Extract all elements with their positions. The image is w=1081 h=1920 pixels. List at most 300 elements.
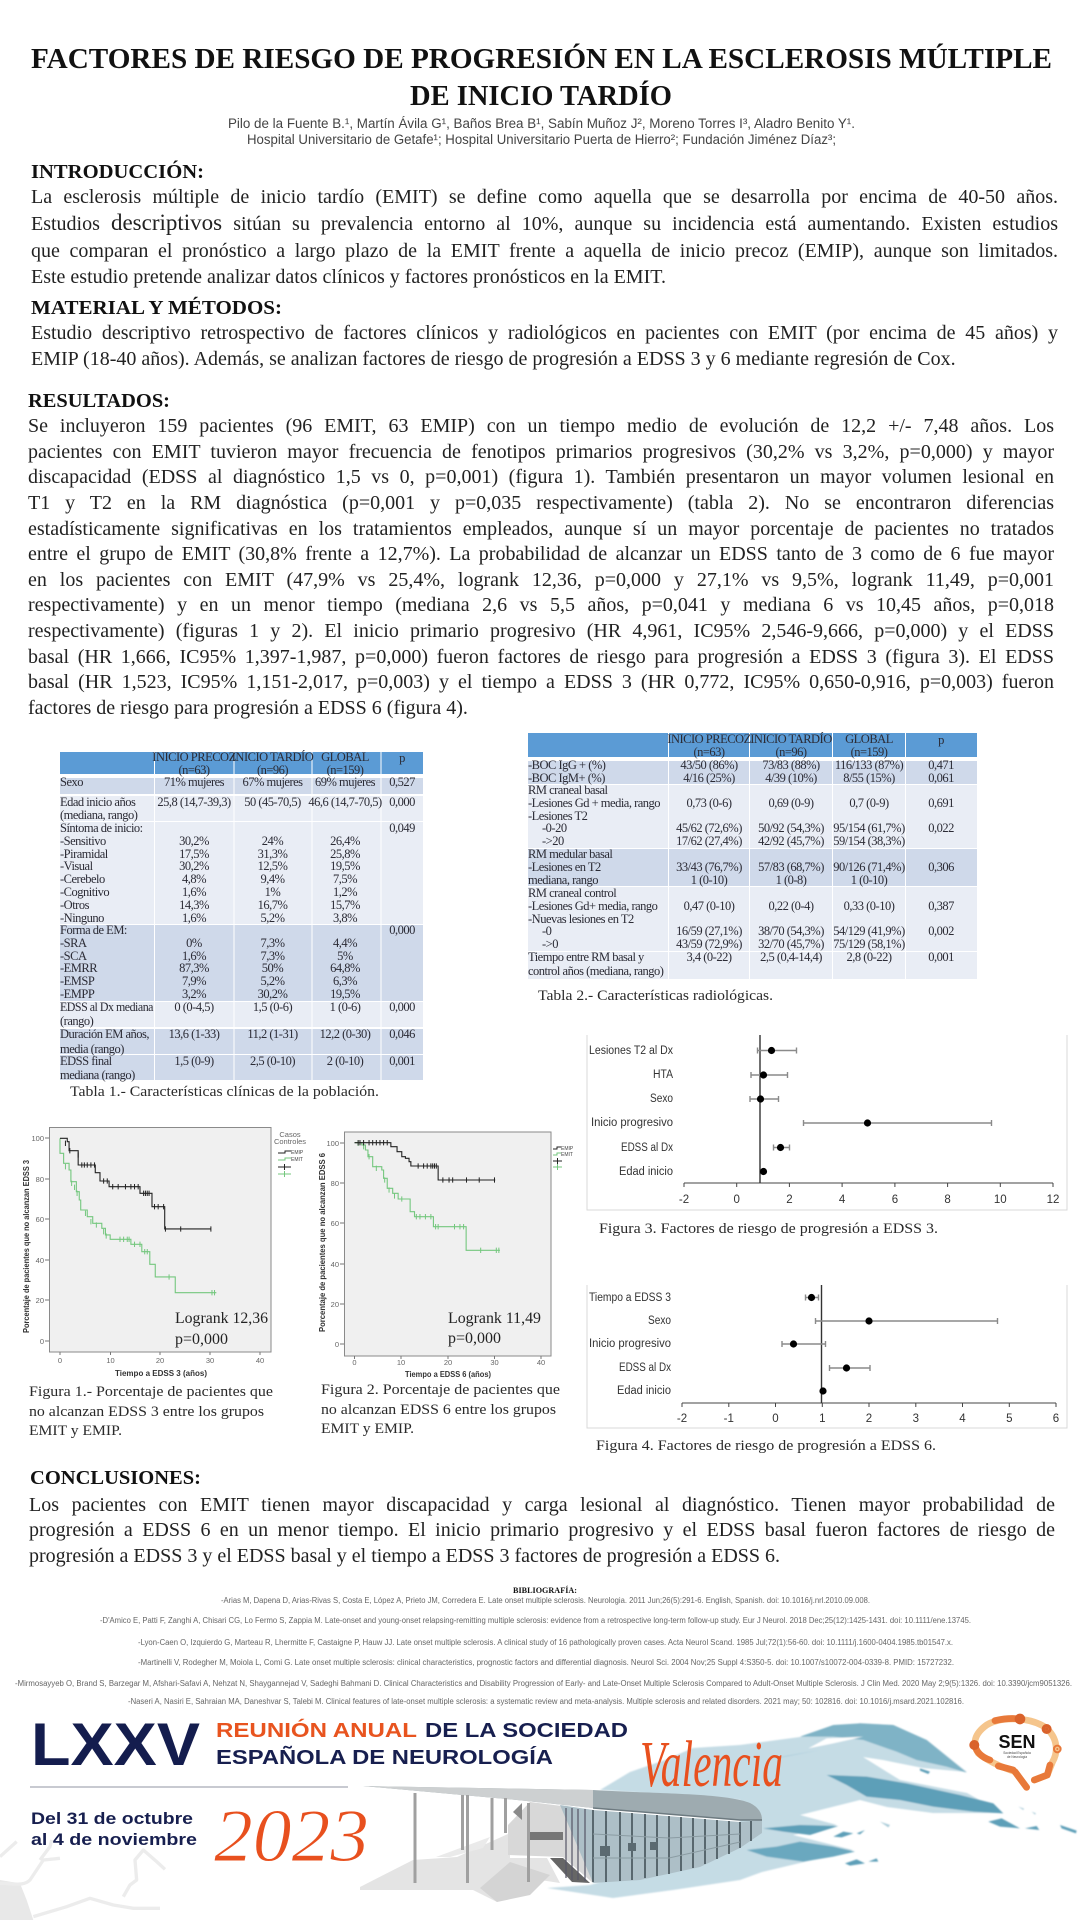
row: EDSS al Dx: 0,000 [389, 1000, 415, 1014]
row: RM craneal control: ->0 [542, 937, 558, 951]
row: BOC: -BOC IgG + (%) [528, 758, 606, 772]
row: síntoma de inicio [60, 821, 415, 925]
labels [589, 1045, 673, 1178]
row: RM craneal control: 16/59 (27,1%) [676, 924, 742, 938]
error bars [750, 1048, 992, 1150]
row: síntoma de inicio: 9,4% [260, 872, 285, 886]
curve: EMIP black [60, 1138, 211, 1232]
row: síntoma de inicio: 31,3% [258, 847, 287, 861]
figure 1: Kaplan-Meier EDSS 3: 20 [156, 1356, 164, 1365]
labels: Edad inicio [617, 1385, 671, 1397]
row: forma de EM: Forma de EM: [60, 923, 127, 937]
row: RM craneal basal: 0,7 (0-9) [849, 796, 889, 810]
row: EDSS al Dx: EDSS al Dx mediana [60, 1000, 154, 1014]
row: forma de EM [60, 923, 415, 1001]
row: RM craneal basal: -Lesiones Gd + media, rango [528, 796, 660, 810]
row: RM medular basal: 33/43 (76,7%) [676, 860, 742, 874]
figure 4: forest plot EDSS 6 [587, 1285, 1067, 1428]
row: EDSS final: 2 (0-10) [327, 1054, 364, 1068]
table 2 header [667, 732, 944, 759]
text block: introducción: Este estudio pretende analizar datos clínicos y factores pronósticos en la EMIT. [31, 266, 666, 288]
row: BOC: 0,471 [928, 758, 954, 772]
row: RM craneal basal: 17/62 (27,4%) [676, 834, 742, 848]
authors and affiliations: Hospital Universitario de Getafe¹; Hospital Universitario Puerta de Hierro²; Fundación Jiménez Díaz³; [247, 132, 836, 147]
row: RM craneal basal: 0,69 (0-9) [768, 796, 814, 810]
row: BOC: 73/83 (88%) [762, 758, 820, 772]
curve: EMIT green [355, 1141, 500, 1253]
axis: 4 [839, 1194, 846, 1206]
labels: Lesiones T2 al Dx [589, 1045, 673, 1057]
figure 1: Kaplan-Meier EDSS 3: 40 [256, 1356, 264, 1365]
row: RM craneal control: 32/70 (45,7%) [758, 937, 824, 951]
text block: introducción: Estudios descriptivos sitúan su prevalencia entorno al 10%, aunque su incidencia está aumentando. Existen estudios [31, 210, 1058, 235]
row: síntoma de inicio: 1,6% [182, 911, 206, 925]
bibliography: -Martinelli V, Rodegher M, Moiola L, Comi G. Late onset multiple sclerosis: clinical characteristics, prognostic factors and differential diagnosis. Neurol Sci. 2004 Nov;25 Suppl 4:S350-5. doi: 10.1007/s10072-004-0339-8. PMID: 15727232. [138, 1658, 954, 1667]
figure 1: Kaplan-Meier EDSS 3: Tiempo a EDSS 3 (años) [115, 1368, 207, 1378]
banner: Valencia: Valencia [640, 1728, 783, 1801]
bibliography: -Arias M, Dapena D, Arias-Rivas S, Costa E, López A, Prieto JM, Corredera E. Late onset multiple sclerosis. Neurologia. 2011 Jun;26(5):291-6. English, Spanish. doi: 10.1016/j.nrl.2010.09.008. [221, 1596, 870, 1605]
row: EDSS al Dx: 1,5 (0-6) [253, 1000, 292, 1014]
bibliography: BIBLIOGRAFÍA: [513, 1585, 577, 1595]
text block: conclusiones [29, 1494, 1055, 1566]
row: duración EM: Duración EM años, [60, 1027, 149, 1041]
caption: figura 2: no alcanzan EDSS 6 entre los grupos [321, 1402, 556, 1418]
bibliography: -D'Amico E, Patti F, Zanghi A, Chisari CG, Lo Fermo S, Zappia M. Late-onset and young-onset relapsing-remitting multiple sclerosis: evidence from a retrospective long-term follow-up study. Eur J Neurol. 2018 Dec;25(12):1425-1431. doi: 10.1111/ene.13745. [100, 1616, 971, 1625]
row: sexo [60, 775, 415, 789]
row: síntoma de inicio: -Cerebelo [60, 872, 105, 886]
logrank: figure 2: p=0,000 [448, 1330, 501, 1347]
caption: figura 4: Figura 4. Factores de riesgo de progresión a EDSS 6. [596, 1438, 936, 1454]
banner: gray brain veins [0, 1840, 165, 1920]
row: síntoma de inicio: 30,2% [179, 834, 209, 848]
table 1 header: GLOBAL [321, 750, 369, 764]
title: DE INICIO TARDÍO [410, 81, 672, 112]
legend: figure 2 [553, 1146, 574, 1170]
columns [415, 1793, 528, 1883]
row: edad inicio: 25,8 (14,7-39,3) [157, 795, 231, 809]
row: forma de EM: 0,000 [389, 923, 415, 937]
row: forma de EM: 4,4% [333, 936, 357, 950]
axis: -2 [679, 1194, 689, 1206]
bibliography [15, 1585, 1072, 1706]
row: forma de EM: 19,5% [330, 987, 360, 1001]
authors and affiliations [228, 116, 855, 147]
legend: figure 1: Controles [274, 1137, 306, 1146]
row: RM craneal control: -0 [542, 924, 552, 938]
row: síntoma de inicio: -Ninguno [60, 911, 104, 925]
axis: 4 [959, 1413, 966, 1425]
row: síntoma de inicio: 1,2% [333, 885, 357, 899]
table 1 header: (n=63) [178, 763, 210, 777]
row: síntoma de inicio: 0,049 [389, 821, 415, 835]
text block: introducción: La esclerosis múltiple de inicio tardío (EMIT) se define como aquella que se desarrolla por encima de 40-50 años. [31, 186, 1058, 208]
legend: figure 2: EMIT [561, 1152, 573, 1158]
row: RM craneal basal: -0-20 [542, 821, 567, 835]
labels: Sexo [648, 1315, 671, 1327]
logrank: figure 2 [448, 1310, 541, 1347]
figure 1: Kaplan-Meier EDSS 3: Porcentaje de pacientes que no alcanzan EDSS 3 [21, 1160, 31, 1333]
row: RM medular basal: RM medular basal [528, 847, 613, 861]
row: forma de EM: -EMSP [60, 974, 95, 988]
row: RM medular basal: mediana, rango [528, 873, 598, 887]
text block: conclusiones: Los pacientes con EMIT tienen mayor discapacidad y carga lesional al diagnóstico. Tienen mayor probabilidad de [29, 1494, 1055, 1516]
table 1 header: INICIO PRECOZ [152, 750, 236, 764]
row: síntoma de inicio: 1,6% [182, 885, 206, 899]
labels: Inicio progresivo [589, 1338, 671, 1350]
bibliography: -Lyon-Caen O, Izquierdo G, Marteau R, Lhermitte F, Castaigne P, Hauw JJ. Late onset multiple sclerosis. A clinical study of 16 pathologically proven cases. Acta Neurol Scand. 1985 Jul;72(1):56-60. doi: 10.1111/j.1600-0404.1985.tb01547.x. [138, 1638, 953, 1647]
row: RM craneal basal [528, 783, 954, 848]
row: RM craneal basal: 95/154 (61,7%) [833, 821, 905, 835]
figure 1: Kaplan-Meier EDSS 3: 100 [31, 1134, 44, 1143]
row: forma de EM: 5,2% [260, 974, 285, 988]
row: BOC: 4/39 (10%) [765, 771, 817, 785]
axis: 3 [913, 1413, 919, 1425]
row: edad inicio: Edad inicio años [60, 795, 136, 809]
table 1 header: (n=159) [327, 763, 364, 777]
figure 3: forest plot EDSS 3 [587, 1035, 1067, 1210]
banner: dates: Del 31 de octubre [31, 1809, 193, 1828]
row: forma de EM: 7,9% [182, 974, 206, 988]
row: síntoma de inicio: 25,8% [330, 847, 360, 861]
row: síntoma de inicio: 12,5% [258, 859, 287, 873]
caption: tabla 2: Tabla 2.- Características radiológicas. [538, 988, 773, 1004]
row: forma de EM: 5% [337, 949, 353, 963]
row: RM craneal control: 0,47 (0-10) [684, 899, 735, 913]
row: síntoma de inicio: -Otros [60, 898, 90, 912]
text block: resultados: respectivamente) y en un menor tiempo (mediana 2,6 vs 5,5 años, p=0,041 y mediana 6 vs 10,45 años, p=0,018 [28, 594, 1054, 616]
facade [560, 1805, 762, 1883]
row: RM craneal basal: 0,691 [928, 796, 954, 810]
row: EDSS final: EDSS final [60, 1054, 113, 1068]
axis: 5 [1006, 1413, 1013, 1425]
row: RM craneal basal: 50/92 (54,3%) [758, 821, 824, 835]
axis: 10 [994, 1194, 1007, 1206]
row: RM craneal basal: 45/62 (72,6%) [676, 821, 742, 835]
banner: LXXV: LXXV [31, 1711, 200, 1778]
table 1 header: (n=96) [257, 763, 288, 777]
row: duración EM: 13,6 (1-33) [169, 1027, 220, 1041]
banner: dates [31, 1809, 197, 1849]
row: síntoma de inicio: 16,7% [258, 898, 287, 912]
figure 1: Kaplan-Meier EDSS 3: 20 [36, 1296, 44, 1305]
row: sexo: 69% mujeres [315, 775, 376, 789]
caption: figura 2: Figura 2. Porcentaje de pacientes que [321, 1382, 560, 1398]
points [790, 1294, 873, 1395]
caption: tabla 1: Tabla 1.- Características clínicas de la población. [70, 1084, 379, 1100]
row: forma de EM: 7,3% [260, 936, 285, 950]
row: RM craneal control: 0,002 [928, 924, 954, 938]
figure 1: Kaplan-Meier EDSS 3: 80 [36, 1175, 44, 1184]
figure 1: Kaplan-Meier EDSS 3: 60 [36, 1215, 44, 1224]
text block: resultados: Se incluyeron 159 pacientes (96 EMIT, 63 EMIP) con un tiempo medio de evolución de 12,2 +/- 7,48 años. Los [28, 415, 1054, 437]
row: RM craneal basal: 59/154 (38,3%) [833, 834, 905, 848]
row: RM craneal basal: RM craneal basal [528, 783, 608, 797]
row: forma de EM: 1,6% [182, 949, 206, 963]
figure 1: Kaplan-Meier EDSS 3: 0 [40, 1337, 44, 1346]
caption: figura 1: no alcanzan EDSS 3 entre los grupos [29, 1404, 264, 1420]
row: EDSS al Dx [60, 1000, 415, 1028]
caption: figura 2 [321, 1382, 560, 1437]
row: RM craneal control: 54/129 (41,9%) [833, 924, 905, 938]
bibliography: -Mirmosayyeb O, Brand S, Barzegar M, Afshari-Safavi A, Nehzat N, Shaygannejad V, Sadeghi Bahmani D. Clinical Characteristics and Disability Progression of Early- and Late-Onset Multiple Sclerosis Compared to Adult-Onset Multiple Sclerosis. J Clin Med. 2020 May 2;9(5):1326. doi: 10.3390/jcm9051326. [15, 1679, 1072, 1688]
figure 2: Kaplan-Meier EDSS 6: Porcentaje de pacientes que no alcanzan EDSS 6 [317, 1153, 327, 1332]
logo: SEN brain: SEN [998, 1732, 1036, 1752]
row: RM craneal control: 0,33 (0-10) [844, 899, 895, 913]
text block: resultados: basal (HR 1,523, IC95% 1,151-2,017, p=0,003) y el tiempo a EDSS 3 (HR 0,772, IC95% 0,650-0,916, p=0,003) fueron [28, 671, 1054, 693]
bibliography: -Naseri A, Nasiri E, Sahraian MA, Daneshvar S, Talebi M. Clinical features of late-onset multiple sclerosis: a systematic review and meta-analysis. Multiple sclerosis and related disorders. 2021 may; 50: 102816. doi: 10.1016/j.msard.2021.102816. [128, 1697, 964, 1706]
row: RM craneal basal: 0,022 [928, 821, 954, 835]
row: forma de EM: -EMPP [60, 987, 95, 1001]
roof [363, 1786, 762, 1820]
row: BOC: 0,061 [928, 771, 954, 785]
figure 2: Kaplan-Meier EDSS 6: 20 [331, 1300, 339, 1309]
title: FACTORES DE RIESGO DE PROGRESIÓN EN LA ESCLEROSIS MÚLTIPLE [31, 44, 1052, 75]
figure 2: Kaplan-Meier EDSS 6: 10 [397, 1358, 405, 1367]
caption: figura 1: Figura 1.- Porcentaje de pacientes que [29, 1384, 273, 1400]
legend: figure 1: EMIP [291, 1150, 304, 1156]
table 2 header: (n=96) [775, 745, 807, 759]
row: edad inicio: 50 (45-70,5) [244, 795, 301, 809]
figure 1: Kaplan-Meier EDSS 3 [21, 1128, 306, 1378]
row: síntoma de inicio: 5,2% [260, 911, 285, 925]
logrank: figure 2: Logrank 11,49 [448, 1310, 541, 1327]
labels: EDSS al Dx [619, 1362, 671, 1374]
banner: congress name: ESPAÑOLA DE NEUROLOGÍA [216, 1746, 553, 1769]
text block: conclusiones: progresión a EDSS 3 y el EDSS basal y el tiempo a EDSS 3 factores de progresión a EDSS 6. [29, 1544, 780, 1566]
left wing [508, 1802, 593, 1883]
axis [677, 1403, 1059, 1425]
row: BOC: -BOC IgM+ (%) [528, 771, 605, 785]
text block: resultados: discapacidad (EDSS al diagnóstico 1,5 vs 0, p=0,001) (figura 1). También presentaron un mayor volumen lesional en [28, 466, 1054, 488]
banner: year: 2023 [214, 1795, 369, 1878]
row: EDSS al Dx: 0 (0-4,5) [174, 1000, 214, 1014]
text block: introducción [31, 186, 1058, 288]
labels: Edad inicio [619, 1166, 673, 1178]
row: RM craneal control: 43/59 (72,9%) [676, 937, 742, 951]
axis: 2 [786, 1194, 793, 1206]
text block: material y métodos [31, 322, 1058, 370]
authors and affiliations: Pilo de la Fuente B.¹, Martín Ávila G¹, Baños Brea B¹, Sabín Muñoz J², Moreno Torres I³, Aladro Benito Y¹. [228, 116, 855, 131]
labels: Tiempo a EDSS 3 [589, 1292, 671, 1304]
row: síntoma de inicio: -Cognitivo [60, 885, 109, 899]
labels: Sexo [650, 1093, 673, 1105]
row: síntoma de inicio: 15,7% [330, 898, 360, 912]
axis: 6 [892, 1194, 898, 1206]
points [757, 1047, 871, 1175]
banner: congress name: REUNIÓN ANUAL [216, 1718, 417, 1742]
row: forma de EM: 30,2% [258, 987, 287, 1001]
axis: 0 [733, 1194, 740, 1206]
text block: resultados: T1 y T2 en la RM diagnóstica (p=0,001 y p=0,035 respectivamente) (tabla 2). No se encontraron diferencias [28, 492, 1054, 514]
curve: EMIT green [60, 1138, 216, 1295]
text block: material y métodos: Estudio descriptivo retrospectivo de factores clínicos y radiológicos en pacientes con EMIT (por encima de 45 años) y [31, 322, 1058, 344]
logo: SEN brain [973, 1717, 1058, 1787]
table 1 header: p [399, 751, 405, 765]
figure 2: Kaplan-Meier EDSS 6: 40 [331, 1260, 339, 1269]
row: síntoma de inicio: 26,4% [330, 834, 360, 848]
row: EDSS final: mediana (rango) [60, 1068, 135, 1082]
text block: resultados: estadísticamente significativas en los tratamientos empleados, aunque sí un mayor porcentaje de pacientes no tratados [28, 518, 1054, 540]
labels: HTA [653, 1069, 673, 1081]
figure 2: Kaplan-Meier EDSS 6: 30 [490, 1358, 499, 1367]
row: EDSS final [60, 1054, 415, 1082]
row: RM craneal control: -Nuevas lesiones en T2 [528, 912, 634, 926]
heading: resultados: RESULTADOS: [28, 391, 170, 412]
row: duración EM: 12,2 (0-30) [320, 1027, 371, 1041]
row: síntoma de inicio: 14,3% [179, 898, 209, 912]
labels [589, 1292, 671, 1397]
table 1 header [152, 750, 405, 777]
row: forma de EM: 3,2% [182, 987, 206, 1001]
text block: resultados [28, 415, 1054, 719]
figure 2: Kaplan-Meier EDSS 6: 0 [352, 1358, 357, 1367]
error bars [782, 1294, 998, 1371]
figure 2: Kaplan-Meier EDSS 6: 100 [326, 1139, 339, 1148]
row: síntoma de inicio: -Sensitivo [60, 834, 106, 848]
logo: SEN brain: de Neurología [1007, 1755, 1027, 1759]
row: síntoma de inicio: 7,5% [333, 872, 357, 886]
table 1 header: INICIO TARDÍO [232, 750, 314, 764]
row: síntoma de inicio: Síntoma de inicio: [60, 821, 143, 835]
row: tiempo entre RM [528, 950, 954, 978]
row: RM craneal control: RM craneal control [528, 886, 617, 900]
figure 1: Kaplan-Meier EDSS 3: 30 [206, 1356, 214, 1365]
row: sexo: 0,527 [389, 775, 415, 789]
row: RM medular basal: 90/126 (71,4%) [833, 860, 905, 874]
row: RM craneal basal: 42/92 (45,7%) [758, 834, 824, 848]
text block: resultados: entre el grupo de EMIT (30,8% frente a 12,7%). La probabilidad de alcanzar un EDSS tanto de 3 como de 6 fue mayor [28, 543, 1054, 565]
row: edad inicio: 46,6 (14,7-70,5) [308, 795, 382, 809]
title [31, 44, 1052, 112]
row: duración EM: media (rango) [60, 1042, 124, 1056]
row: RM craneal basal: ->20 [542, 834, 564, 848]
row: sexo: 71% mujeres [164, 775, 225, 789]
row: BOC: 4/16 (25%) [683, 771, 735, 785]
table 2 header: p [938, 733, 944, 747]
row: tiempo entre RM: control años (mediana, rango) [528, 964, 664, 978]
figure 2: Kaplan-Meier EDSS 6 [317, 1132, 574, 1379]
curve: EMIP black [355, 1140, 495, 1183]
row: BOC: 8/55 (15%) [843, 771, 895, 785]
row: duración EM: 11,2 (1-31) [247, 1027, 298, 1041]
row: RM craneal basal: -Lesiones T2 [528, 809, 588, 823]
table 2 header: (n=63) [693, 745, 725, 759]
row: sexo: 67% mujeres [242, 775, 303, 789]
text block: resultados: respectivamente) (figuras 1 y 2). El inicio primario progresivo (HR 4,961, IC95% 2,546-9,666, p=0,000) y el EDSS [28, 620, 1054, 642]
row: síntoma de inicio: 24% [262, 834, 283, 848]
row: forma de EM: 64,8% [330, 961, 360, 975]
legend: figure 2: EMIP [561, 1146, 574, 1152]
text block: resultados: pacientes con EMIT tuvieron mayor frecuencia de fenotipos primarios progresivos (30,2% vs 3,2%, p=0,000) y mayor [28, 441, 1054, 463]
axis: 8 [944, 1194, 951, 1206]
axis: -1 [724, 1413, 734, 1425]
axis: 2 [866, 1413, 872, 1425]
text block: resultados: basal (HR 1,666, IC95% 1,397-1,987, p=0,000) fueron factores de riesgo para progresión a EDSS 3 (figura 3). El EDSS [28, 646, 1054, 668]
banner: congress name [216, 1718, 628, 1769]
row: síntoma de inicio: 3,8% [333, 911, 357, 925]
row: duración EM [60, 1027, 415, 1056]
row: RM medular basal: 57/83 (68,7%) [758, 860, 824, 874]
text block: introducción: que comparan el pronóstico a largo plazo de la EMIT frente a aquella de inicio precoz (EMIP), aunque son limitados. [31, 240, 1058, 262]
text block: conclusiones: progresión a EDSS 6 en un menor tiempo. El inicio primario progresivo y el EDSS basal fueron factores de riesgo de [29, 1519, 1055, 1541]
row: síntoma de inicio: 19,5% [330, 859, 360, 873]
row: EDSS final: 2,5 (0-10) [250, 1054, 295, 1068]
row: forma de EM: -SRA [60, 936, 87, 950]
row: RM medular basal: 0,306 [928, 860, 954, 874]
row: sexo: Sexo [60, 775, 83, 789]
table 2 header: INICIO PRECOZ [667, 732, 751, 746]
row: EDSS al Dx: 1 (0-6) [330, 1000, 361, 1014]
caption: figura 1 [29, 1384, 273, 1439]
row: síntoma de inicio: -Visual [60, 859, 94, 873]
banner: watercolor wash [547, 1723, 1077, 1898]
heading: introducción: INTRODUCCIÓN: [31, 161, 204, 183]
figure 2: Kaplan-Meier EDSS 6: Tiempo a EDSS 6 (años) [405, 1369, 491, 1379]
row: tiempo entre RM: 3,4 (0-22) [686, 950, 732, 964]
axis: 0 [772, 1413, 779, 1425]
row: tiempo entre RM: 0,001 [928, 950, 954, 964]
figure 1: Kaplan-Meier EDSS 3: 0 [58, 1356, 62, 1365]
row: RM craneal basal: 0,73 (0-6) [686, 796, 732, 810]
table 2: radiological characteristics [528, 732, 977, 979]
row: EDSS final: 1,5 (0-9) [174, 1054, 214, 1068]
row: tiempo entre RM: 2,8 (0-22) [846, 950, 892, 964]
row: síntoma de inicio: 1% [265, 885, 280, 899]
axis: 12 [1047, 1194, 1059, 1206]
row: EDSS final: 0,001 [389, 1054, 415, 1068]
figure 2: Kaplan-Meier EDSS 6: 0 [335, 1340, 339, 1349]
row: RM craneal control: 75/129 (58,1%) [833, 937, 905, 951]
logo: SEN brain: Sociedad Española [1003, 1751, 1031, 1755]
axis: 1 [819, 1413, 826, 1425]
text block: resultados: en los pacientes con EMIT (47,9% vs 25,4%, logrank 12,36, p=0,000 y 27,1% vs 9,5%, logrank 11,49, p=0,001 [28, 569, 1054, 591]
text block: resultados: factores de riesgo para progresión a EDSS 6 (figura 4). [28, 697, 468, 719]
row: forma de EM: 6,3% [333, 974, 357, 988]
logrank: figure 1: p=0,000 [175, 1331, 228, 1348]
row: forma de EM: 50% [262, 961, 283, 975]
figure 2: Kaplan-Meier EDSS 6: 60 [331, 1219, 339, 1228]
logrank: figure 1 [175, 1310, 268, 1348]
row: RM craneal control [528, 886, 954, 951]
row: RM craneal control: 38/70 (54,3%) [758, 924, 824, 938]
row: forma de EM: 87,3% [179, 961, 209, 975]
row: tiempo entre RM: Tiempo entre RM basal y [528, 950, 645, 964]
row: RM medular basal: 1 (0-10) [691, 873, 728, 887]
banner: building illustration [360, 1786, 762, 1902]
table 2 header: (n=159) [851, 745, 888, 759]
row: RM craneal control: -Lesiones Gd+ media, rango [528, 899, 658, 913]
banner: congress name: DE LA SOCIEDAD [425, 1720, 628, 1742]
row: BOC: 116/133 (87%) [835, 758, 904, 772]
heading: conclusiones: CONCLUSIONES: [30, 1468, 201, 1489]
caption: figura 1: EMIT y EMIP. [29, 1423, 122, 1439]
row: BOC [528, 758, 954, 785]
row: BOC: 43/50 (86%) [680, 758, 738, 772]
table 2 header: GLOBAL [845, 732, 893, 746]
table 2 header: INICIO TARDÍO [750, 732, 832, 746]
ground shadow [360, 1833, 560, 1902]
row: edad inicio: (mediana, rango) [60, 808, 138, 822]
caption: figura 3: Figura 3. Factores de riesgo de progresión a EDSS 3. [599, 1221, 938, 1237]
caption: figura 2: EMIT y EMIP. [321, 1421, 414, 1437]
row: forma de EM: 0% [186, 936, 202, 950]
row: edad inicio [60, 795, 415, 822]
row: RM medular basal [528, 847, 954, 887]
axis: -2 [677, 1413, 687, 1425]
row: forma de EM: 7,3% [260, 949, 285, 963]
row: tiempo entre RM: 2,5 (0,4-14,4) [760, 950, 822, 964]
row: RM craneal control: 0,387 [928, 899, 954, 913]
